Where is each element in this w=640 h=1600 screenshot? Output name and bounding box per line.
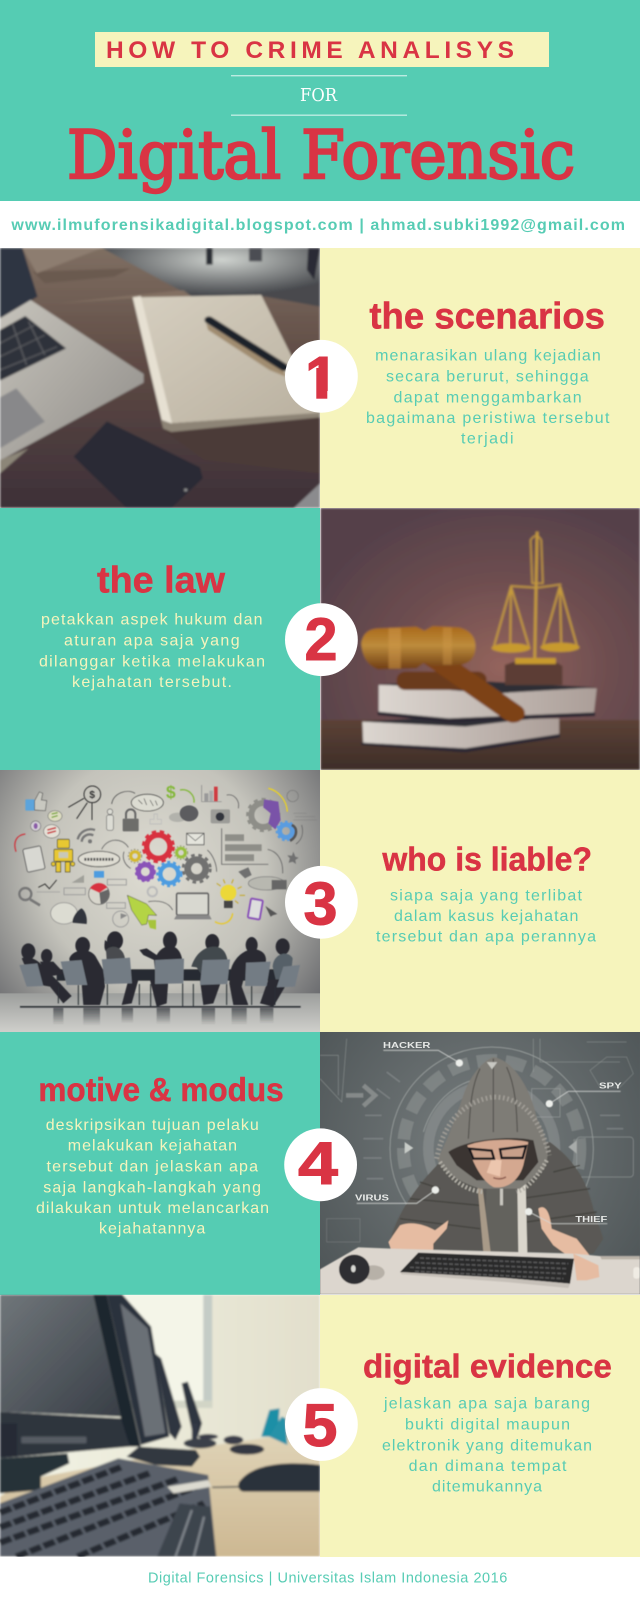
labels	[383, 1050, 459, 1063]
title band: HOW TO CRIME ANALISYS	[106, 37, 514, 64]
heading: the scenarios	[369, 295, 605, 336]
description: bukti digital maupun	[405, 1416, 570, 1433]
description: kejahatan tersebut.	[72, 674, 232, 691]
mouse	[339, 1255, 370, 1284]
hood	[437, 1057, 547, 1189]
torso	[392, 1142, 603, 1254]
main title: Digital Forensic	[67, 117, 575, 194]
panel: section 5 digital evidence	[0, 1295, 640, 1557]
number badge 5: 5	[302, 1392, 338, 1459]
description	[36, 1117, 269, 1238]
photo: gavel, books and scales	[320, 508, 640, 770]
description: dilakukan untuk melancarkan	[36, 1200, 269, 1217]
number badge 2: 2	[304, 606, 338, 673]
icon: robot	[51, 839, 75, 872]
description: dan dimana tempat	[409, 1458, 567, 1475]
description	[382, 1396, 592, 1496]
title band	[95, 32, 549, 67]
description: dilanggar ketika melakukan	[39, 653, 265, 670]
photo: business team silhouettes under doodles on a concrete wall	[0, 770, 320, 1032]
description: bagaimana peristiwa tersebut	[366, 410, 610, 427]
heading: motive & modus	[38, 1071, 284, 1108]
photo: hooded hacker at a keyboard: SPY	[599, 1082, 623, 1091]
description: ditemukannya	[432, 1479, 542, 1496]
subtitle: for: FOR	[300, 86, 338, 106]
hands	[388, 1220, 449, 1250]
number badge 1: 1	[305, 345, 338, 412]
description: aturan apa saja yang	[64, 633, 240, 650]
desk	[320, 1247, 640, 1294]
description: siapa saja yang terlibat	[390, 887, 583, 904]
number badge 3: 3	[304, 870, 338, 938]
description: elektronik yang ditemukan	[382, 1437, 592, 1454]
panel: section 3 who is liable	[0, 770, 640, 1032]
description	[39, 612, 265, 691]
heading: the law	[97, 560, 225, 601]
photo: business team silhouettes under doodles on a concrete wall: $	[166, 782, 176, 802]
photo: hooded hacker at a keyboard: THIEF	[575, 1215, 607, 1224]
photo: hooded hacker at a keyboard: VIRUS	[355, 1194, 390, 1203]
icon: thumbs up	[25, 792, 47, 811]
heading: digital evidence	[363, 1348, 612, 1385]
description: secara berurut, sehingga	[386, 369, 589, 386]
description: deskripsikan tujuan pelaku	[46, 1117, 259, 1134]
panel: section 2 the law	[0, 508, 640, 770]
description	[366, 348, 610, 448]
description: tersebut dan jelaskan apa	[46, 1159, 258, 1176]
photo: business team silhouettes under doodles on a concrete wall: $	[89, 790, 95, 801]
photo: row of computers on a desk	[0, 1295, 320, 1557]
footer: Digital Forensics | Universitas Islam Indonesia 2016	[148, 1570, 507, 1586]
description: kejahatannya	[99, 1221, 205, 1238]
description: melakukan kejahatan	[68, 1138, 237, 1155]
description: jelaskan apa saja barang	[383, 1396, 590, 1413]
number badge 4: 4	[298, 1130, 339, 1197]
description: menarasikan ulang kejadian	[375, 348, 601, 365]
panel: section 1 the scenarios	[0, 248, 640, 508]
number badge 3	[285, 866, 358, 939]
photo: hooded hacker at a keyboard	[320, 1032, 640, 1294]
number badge 4	[284, 1128, 357, 1201]
description: tersebut dan apa perannya	[376, 929, 596, 946]
contact strip: www.ilmuforensikadigital.blogspot.com | ahmad.subki1992@gmail.com	[10, 217, 625, 234]
description	[376, 887, 596, 946]
people silhouettes at table	[19, 931, 301, 1025]
number badge 2	[285, 603, 358, 676]
description: saja langkah-langkah yang	[43, 1179, 261, 1196]
photo: laptop notebook pen and phone on a desk	[0, 248, 320, 508]
description: petakkan aspek hukum dan	[41, 612, 262, 629]
description: terjadi	[461, 431, 514, 448]
panel: section 4 motive and modus	[0, 1032, 640, 1295]
wifi doodle	[78, 829, 95, 842]
photo: hooded hacker at a keyboard: HACKER	[383, 1041, 431, 1050]
keyboard	[400, 1253, 574, 1284]
heading: who is liable?	[381, 840, 592, 877]
description: dapat menggambarkan	[394, 389, 582, 406]
face	[467, 1140, 528, 1187]
header panel	[0, 0, 640, 201]
description: dalam kasus kejahatan	[394, 908, 578, 925]
number badge 1	[285, 340, 358, 413]
number badge 5	[285, 1388, 358, 1461]
